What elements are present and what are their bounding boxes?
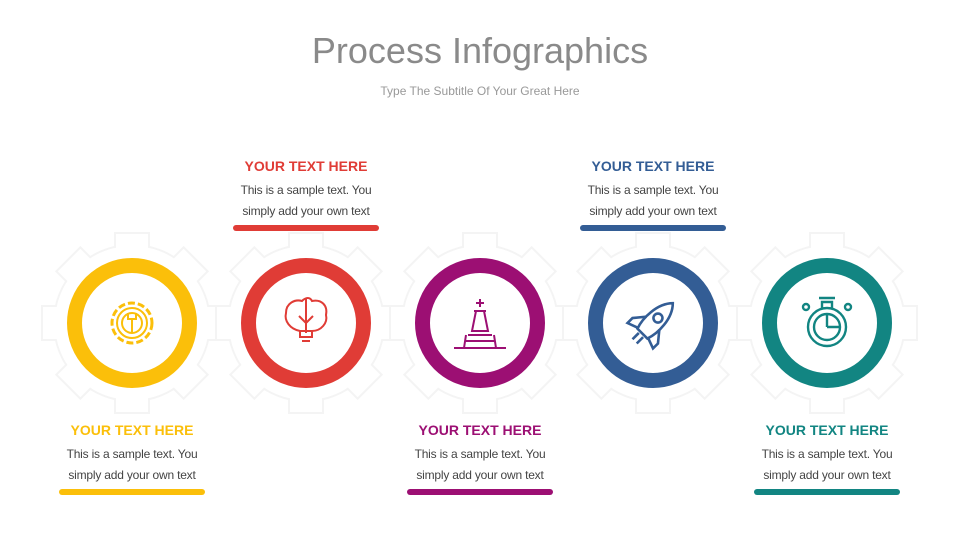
icon: gear with wrench [112, 303, 152, 343]
text block 2 (top, red): YOUR TEXT HERE [245, 158, 367, 174]
title: Process Infographics [312, 30, 648, 71]
step 1: gear background and yellow circle [42, 233, 222, 413]
text block 3 (bottom, purple): simply add your own text [416, 468, 544, 482]
icon: chess king [454, 299, 506, 348]
text block 5 (bottom, teal): This is a sample text. You [762, 447, 892, 461]
text block 1 (bottom, yellow): This is a sample text. You [67, 447, 197, 461]
text block 1 (bottom, yellow): simply add your own text [68, 468, 196, 482]
step 5: teal circle [737, 233, 917, 413]
step 4: blue circle [563, 233, 743, 413]
text block 5 (bottom, teal): simply add your own text [763, 468, 891, 482]
text block 3 (bottom, purple): YOUR TEXT HERE [419, 422, 541, 438]
step 3: purple circle [390, 233, 570, 413]
icon: rocket [622, 290, 686, 354]
text block 4 (top, blue): This is a sample text. You [588, 183, 718, 197]
text block 5 (bottom, teal) [754, 422, 900, 495]
text block 1 (bottom, yellow) [59, 422, 205, 495]
icon: stopwatch [803, 298, 851, 346]
subtitle: Type The Subtitle Of Your Great Here [380, 84, 580, 98]
text block 3 (bottom, purple) [407, 422, 553, 495]
text block 2 (top, red): This is a sample text. You [241, 183, 371, 197]
text block 1 (bottom, yellow): YOUR TEXT HERE [71, 422, 193, 438]
text block 4 (top, blue) [580, 158, 726, 231]
text block 4 (top, blue): simply add your own text [589, 204, 717, 218]
text block 2 (top, red) [233, 158, 379, 231]
text block 4 (top, blue): YOUR TEXT HERE [592, 158, 714, 174]
text block 3 (bottom, purple): This is a sample text. You [415, 447, 545, 461]
text block 5 (bottom, teal): YOUR TEXT HERE [766, 422, 888, 438]
icon: brain bulb [286, 298, 326, 341]
text block 2 (top, red): simply add your own text [242, 204, 370, 218]
step 2: red circle [216, 233, 396, 413]
